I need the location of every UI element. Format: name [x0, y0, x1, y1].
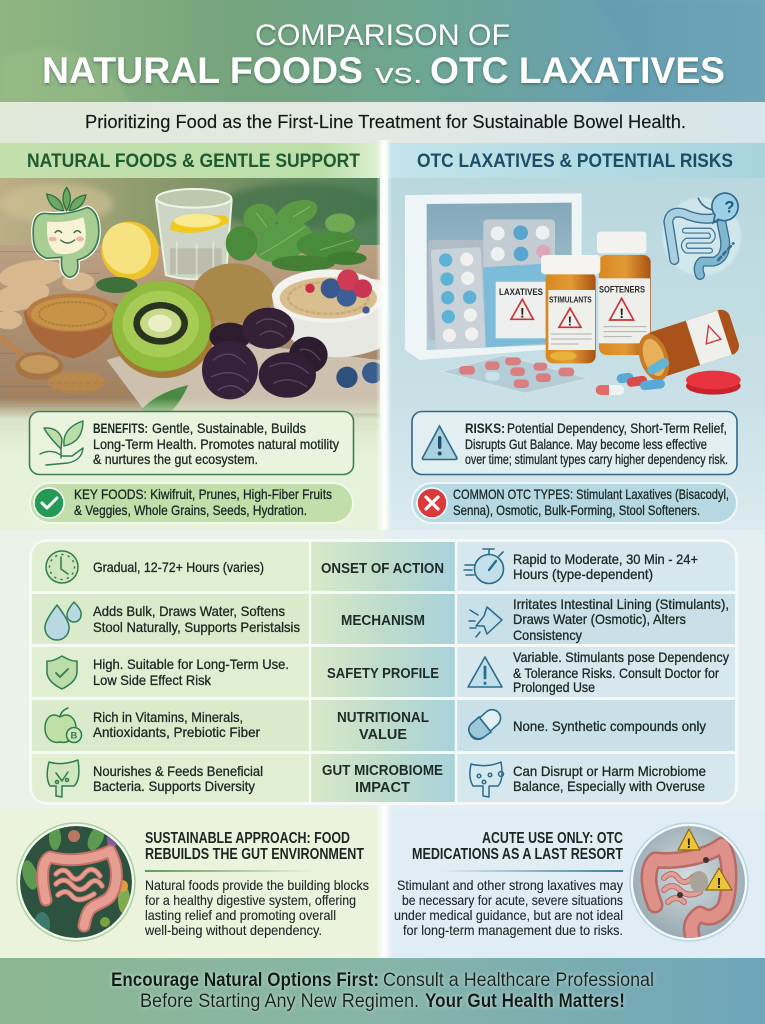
- row: gut microbiome impact: [47, 760, 706, 797]
- footer banner: Encourage Natural Options First:: [111, 970, 379, 991]
- row: safety profile: Variable. Stimulants pose Dependency: [513, 650, 729, 665]
- body text: [144, 878, 369, 938]
- icon: check: [34, 488, 64, 518]
- right column heading: OTC LAXATIVES & POTENTIAL RISKS: [417, 151, 733, 172]
- risks box: [412, 412, 737, 474]
- row: gut microbiome impact: Balance, Especially with Overuse: [513, 779, 705, 794]
- row: mechanism: Consistency: [513, 628, 582, 643]
- row: gut microbiome impact: GUT MICROBIOME: [322, 763, 443, 779]
- key foods pill: [30, 483, 353, 523]
- illustration: gut among plants: [17, 823, 135, 941]
- benefits box: Gentle, Sustainable, Builds: [152, 421, 306, 436]
- stimulants bottle: [546, 272, 596, 363]
- benefits box: BENEFITS:: [93, 421, 148, 436]
- icon: sprout in hand: [40, 421, 83, 465]
- icon: healthy gut: [47, 760, 79, 797]
- row: onset of action: ONSET OF ACTION: [321, 561, 444, 577]
- key foods pill: KEY FOODS: Kiwifruit, Prunes, High-Fiber Fruits: [74, 487, 332, 502]
- risks box: Potential Dependency, Short-Term Relief,: [507, 421, 727, 436]
- photo: medicine cabinet and pills: !: [568, 314, 572, 329]
- icon: troubled gut: [662, 193, 741, 276]
- body text: [394, 878, 623, 938]
- body text: for long-term management due to risks.: [403, 923, 623, 938]
- illustration: damaged gut: [630, 823, 748, 941]
- comparison table: [0, 530, 765, 810]
- icon: cross: [417, 488, 447, 518]
- row: mechanism: Draws Water (Osmotic), Alters: [513, 612, 686, 627]
- body text: under medical guidance, but are not ideal: [394, 908, 623, 923]
- body text: be necessary for acute, severe situations: [402, 893, 623, 908]
- body text: lasting relief and promoting overall: [145, 908, 336, 923]
- heading: SUSTAINABLE APPROACH: FOOD: [145, 830, 350, 847]
- header banner: [0, 0, 765, 103]
- icon: apple with vitamin: [45, 708, 82, 742]
- red cap: [686, 377, 741, 395]
- box: [483, 263, 548, 347]
- blueberries: [336, 367, 358, 388]
- title: COMPARISON OF: [255, 19, 510, 52]
- row: safety profile: Low Side Effect Risk: [93, 673, 211, 688]
- risks box: Disrupts Gut Balance. May become less effective: [465, 437, 707, 452]
- row: mechanism: Irritates Intestinal Lining (Stimulants),: [513, 597, 729, 612]
- panel: sustainable approach: REBUILDS THE GUT ENVIRONMENT: [145, 846, 364, 863]
- left column heading: NATURAL FOODS & GENTLE SUPPORT: [27, 151, 360, 172]
- oat bowl: [272, 277, 380, 357]
- row: nutritional value: [45, 706, 706, 743]
- row: nutritional value: None. Synthetic compounds only: [513, 719, 706, 734]
- illustration: damaged gut: !: [716, 875, 722, 892]
- row: nutritional value: Rich in Vitamins, Minerals,: [93, 710, 243, 725]
- icon: warning triangle: [422, 426, 457, 460]
- row: nutritional value: NUTRITIONAL: [337, 710, 429, 726]
- risks box: RISKS:: [465, 421, 505, 436]
- spilled bottle: [633, 307, 742, 385]
- photo: medicine cabinet and pills: STIMULANTS: [549, 296, 592, 305]
- common OTC types pill: [412, 483, 737, 523]
- row: mechanism: MECHANISM: [341, 613, 425, 629]
- row: mechanism: Adds Bulk, Draws Water, Softens: [93, 604, 285, 619]
- title: OTC LAXATIVES: [430, 50, 725, 91]
- spoon and seeds: [0, 337, 23, 357]
- footer banner: Your Gut Health Matters!: [425, 991, 625, 1012]
- illustration: damaged gut: !: [686, 835, 691, 851]
- footer banner: Consult a Healthcare Professional: [383, 970, 654, 991]
- row: nutritional value: VALUE: [359, 727, 407, 743]
- flat blister: [442, 355, 588, 393]
- icon: disrupted gut: [470, 762, 504, 797]
- icon: warning signs: [678, 829, 700, 850]
- lemon: [101, 222, 159, 280]
- benefits box: Long-Term Health. Promotes natural motility: [93, 437, 339, 452]
- benefits box: & nurtures the gut ecosystem.: [93, 452, 258, 467]
- photo: medicine cabinet and pills: !: [520, 304, 525, 320]
- row: onset of action: Rapid to Moderate, 30 Min - 24+: [513, 552, 698, 567]
- row: onset of action: Hours (type-dependent): [513, 567, 653, 582]
- row: nutritional value: Antioxidants, Prebiotic Fiber: [93, 725, 260, 740]
- photo: natural foods spread: [0, 178, 384, 432]
- row: safety profile: SAFETY PROFILE: [327, 666, 439, 682]
- left column heading: [0, 143, 380, 179]
- icon: happy gut: [33, 187, 99, 277]
- panel: natural foods: [0, 178, 384, 540]
- rows: background cells: [32, 542, 735, 802]
- wooden bowl: [23, 299, 121, 358]
- title: vs.: [375, 58, 423, 90]
- centre divider glow: [376, 140, 392, 540]
- panel: sustainable approach: [16, 822, 369, 942]
- photo: medicine cabinet and pills: LAXATIVES: [499, 287, 543, 297]
- icon: troubled gut: ?: [724, 198, 735, 217]
- title: [42, 19, 725, 91]
- row: mechanism: Stool Naturally, Supports Peristalsis: [93, 620, 300, 635]
- row: safety profile: Prolonged Use: [513, 680, 595, 695]
- panel: OTC laxatives: [388, 178, 765, 540]
- icon: warning: [468, 657, 502, 687]
- icon: capsule: [466, 706, 504, 743]
- title: NATURAL FOODS: [42, 50, 363, 91]
- row: gut microbiome impact: Can Disrupt or Harm Microbiome: [513, 764, 706, 779]
- photo: medicine cabinet and pills: SOFTENERS: [599, 285, 645, 295]
- footer banner: [0, 958, 765, 1024]
- photo: medicine cabinet and pills: [405, 193, 742, 395]
- leaf: [140, 385, 188, 411]
- ginger: [0, 256, 94, 329]
- body text: for a healthy digestive system, offering: [145, 893, 356, 908]
- cloth: [107, 337, 380, 413]
- icon: irritation arrow: [469, 607, 502, 637]
- key foods pill: & Veggies, Whole Grains, Seeds, Hydration.: [74, 503, 307, 518]
- photo: medicine cabinet and pills: !: [619, 305, 624, 321]
- body text: well-being without dependency.: [144, 923, 322, 938]
- benefits box: [30, 412, 354, 474]
- body text: Stimulant and other strong laxatives may: [397, 878, 623, 893]
- softeners bottle: [599, 255, 651, 355]
- cut kiwi: [111, 281, 215, 378]
- row: onset of action: [46, 549, 698, 584]
- subtitle band: Prioritizing Food as the First-Line Treatment for Sustainable Bowel Health.: [85, 111, 686, 132]
- row: safety profile: [47, 650, 729, 695]
- panel: acute use only: [385, 810, 765, 958]
- icon: clock: [46, 551, 78, 583]
- cabinet: [405, 193, 582, 360]
- row: gut microbiome impact: Nourishes & Feeds Beneficial: [93, 764, 263, 779]
- blister front: [431, 247, 486, 350]
- whole kiwi: [193, 263, 275, 323]
- glass: [156, 193, 232, 279]
- basil: [96, 277, 137, 293]
- row: safety profile: High. Suitable for Long-Term Use.: [93, 657, 289, 672]
- table grid lines: [31, 541, 736, 803]
- prunes: [202, 308, 328, 399]
- subtitle band: [0, 102, 765, 143]
- icon: water drops: [45, 602, 81, 640]
- row: safety profile: & Tolerance Risks. Consult Doctor for: [513, 666, 719, 681]
- footer banner: Before Starting Any New Regimen.: [140, 991, 419, 1012]
- body text: Natural foods provide the building blocks: [145, 878, 369, 893]
- fade below photo: [0, 398, 380, 458]
- icon: shield: [47, 656, 77, 689]
- row: onset of action: Gradual, 12-72+ Hours (varies): [93, 560, 264, 575]
- common OTC types pill: Senna), Osmotic, Bulk-Forming, Stool Softeners.: [453, 503, 700, 518]
- heading: ACUTE USE ONLY: OTC: [482, 830, 623, 847]
- row: nutritional value: B: [70, 730, 78, 742]
- panel: acute use only: MEDICATIONS AS A LAST RESORT: [412, 846, 623, 863]
- right column heading: [388, 143, 765, 179]
- loose pills: [596, 385, 624, 395]
- row: gut microbiome impact: IMPACT: [355, 780, 410, 796]
- icon: stopwatch: [464, 549, 504, 584]
- blister back: [428, 240, 495, 340]
- row: mechanism: [45, 597, 729, 643]
- row: gut microbiome impact: Bacteria. Supports Diversity: [93, 779, 255, 794]
- spinach: [226, 195, 367, 271]
